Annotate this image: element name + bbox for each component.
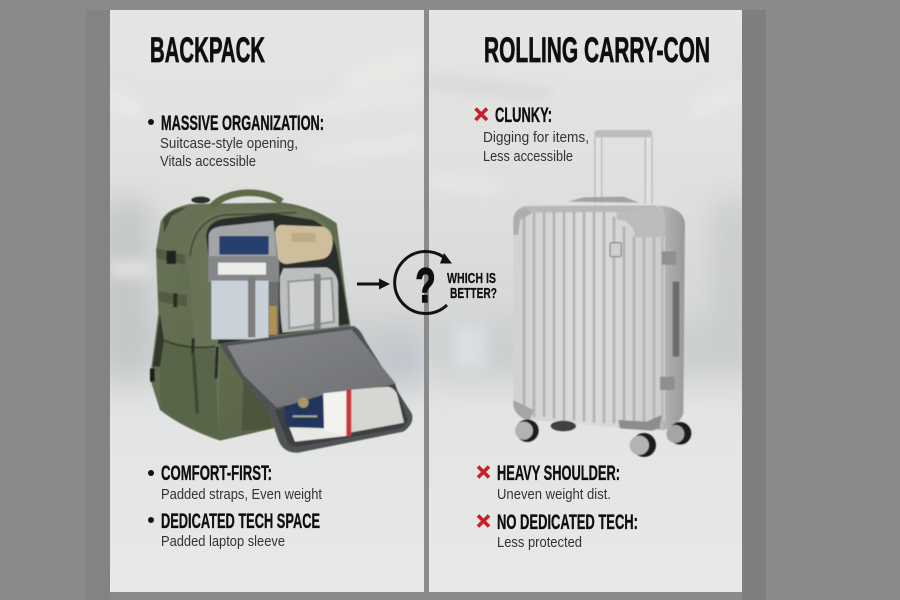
drawback: clunky: CLUNKY:: [495, 104, 552, 127]
side strip: [269, 282, 279, 335]
drawback: clunky: [476, 104, 589, 165]
drawback: clunky: Less accessible: [483, 149, 573, 165]
passport emblem: [298, 397, 309, 408]
front shell: [513, 205, 665, 431]
left shadow strip: [86, 10, 110, 600]
arrow: to question: [357, 278, 390, 290]
benefit: massive organization: [148, 112, 324, 170]
telescopic handle outline: [598, 137, 649, 203]
drawback: no dedicated tech: [478, 511, 638, 551]
benefit: dedicated tech space: [148, 510, 320, 550]
lower pocket panel: [242, 380, 273, 431]
laptop: [347, 387, 404, 433]
grey packing cube: [280, 267, 339, 333]
back wheel: [551, 421, 576, 431]
left foot clip: [150, 368, 155, 382]
drawback: heavy shoulder: HEAVY SHOULDER:: [497, 462, 620, 485]
label: which is better: [447, 270, 497, 302]
panel: rolling carry-on: [429, 10, 755, 592]
lower right corner: [618, 415, 662, 431]
back body: [150, 203, 349, 441]
top clip: [191, 197, 210, 203]
label: which is better: BETTER?: [450, 285, 497, 302]
cube strap: [314, 274, 321, 329]
white sheet: [289, 427, 347, 442]
icon: question cycle: ?: [416, 260, 436, 313]
white ticket: [218, 263, 266, 275]
wheel 3: [666, 422, 691, 445]
bottom latch: [660, 377, 675, 390]
icon: question cycle: [395, 252, 452, 314]
boarding pass: [323, 391, 347, 436]
drawback: clunky: Digging for items,: [483, 130, 589, 146]
gold zipper: [269, 306, 277, 335]
benefit: comfort-first: COMFORT-FIRST:: [161, 462, 272, 485]
lower left corner: [513, 400, 533, 420]
label: which is better: WHICH IS: [447, 270, 496, 287]
tan pouch: [275, 225, 333, 264]
red stripe: [346, 389, 351, 436]
side shell: [658, 205, 685, 430]
benefit: dedicated tech space: DEDICATED TECH SPACE: [161, 510, 320, 533]
pocket fold: [193, 353, 197, 413]
panel: backpack: [100, 10, 430, 592]
drawback: heavy shoulder: [478, 462, 620, 503]
badge: [610, 243, 621, 257]
top latch: [662, 251, 676, 265]
mid sleeve: [208, 256, 279, 282]
right shadow strip: [742, 10, 766, 600]
side pocket: [160, 340, 218, 437]
handle base: [568, 197, 639, 203]
blue document: [219, 236, 269, 255]
strap: [248, 277, 255, 337]
benefit: comfort-first: [148, 462, 322, 503]
handle top bar: [594, 130, 652, 137]
passport label: [293, 415, 317, 417]
top handle: [212, 193, 282, 207]
illustration: backpack: [150, 193, 412, 453]
top band: [520, 205, 660, 213]
telescopic handle: [598, 137, 649, 203]
flap outer: [219, 326, 412, 453]
cube inner: [288, 278, 334, 328]
flap lid: [227, 329, 396, 407]
top dark edge: [163, 207, 187, 233]
ribs: [523, 212, 663, 425]
benefit: massive organization: Suitcase-style opening,: [160, 136, 298, 152]
benefit: massive organization: MASSIVE ORGANIZATION:: [161, 112, 324, 135]
shell seam: [190, 213, 297, 257]
benefit: dedicated tech space: Padded laptop sleeve: [161, 534, 285, 550]
title: rolling carry-on: ROLLING CARRY-CON: [484, 31, 710, 70]
side grip: [673, 282, 679, 357]
benefit: comfort-first: Padded straps, Even weight: [161, 487, 322, 503]
dark left edge: [153, 313, 164, 367]
center divider: [424, 10, 429, 600]
pocket opening: [275, 384, 407, 447]
light mesh sleeve: [211, 281, 269, 339]
upper pouch: [209, 221, 277, 260]
drawback: no dedicated tech: Less protected: [497, 535, 582, 551]
upper right corner: [617, 207, 665, 237]
wheel 1: [515, 419, 539, 442]
illustration: suitcase: [513, 130, 691, 457]
tan pouch panel: [292, 233, 316, 242]
drawback: no dedicated tech: NO DEDICATED TECH:: [497, 511, 638, 534]
left straps: [157, 248, 187, 307]
strap buckle: [167, 251, 176, 264]
right zipper: [193, 338, 217, 378]
passport: [284, 395, 324, 428]
wheel 2: [630, 433, 656, 457]
mesh line: [163, 339, 215, 347]
drawback: heavy shoulder: Uneven weight dist.: [497, 487, 611, 503]
interior: [206, 213, 349, 344]
front shell: [188, 208, 351, 437]
upper left corner: [513, 207, 532, 235]
title: backpack: BACKPACK: [150, 31, 265, 70]
benefit: massive organization: Vitals accessible: [160, 154, 256, 170]
